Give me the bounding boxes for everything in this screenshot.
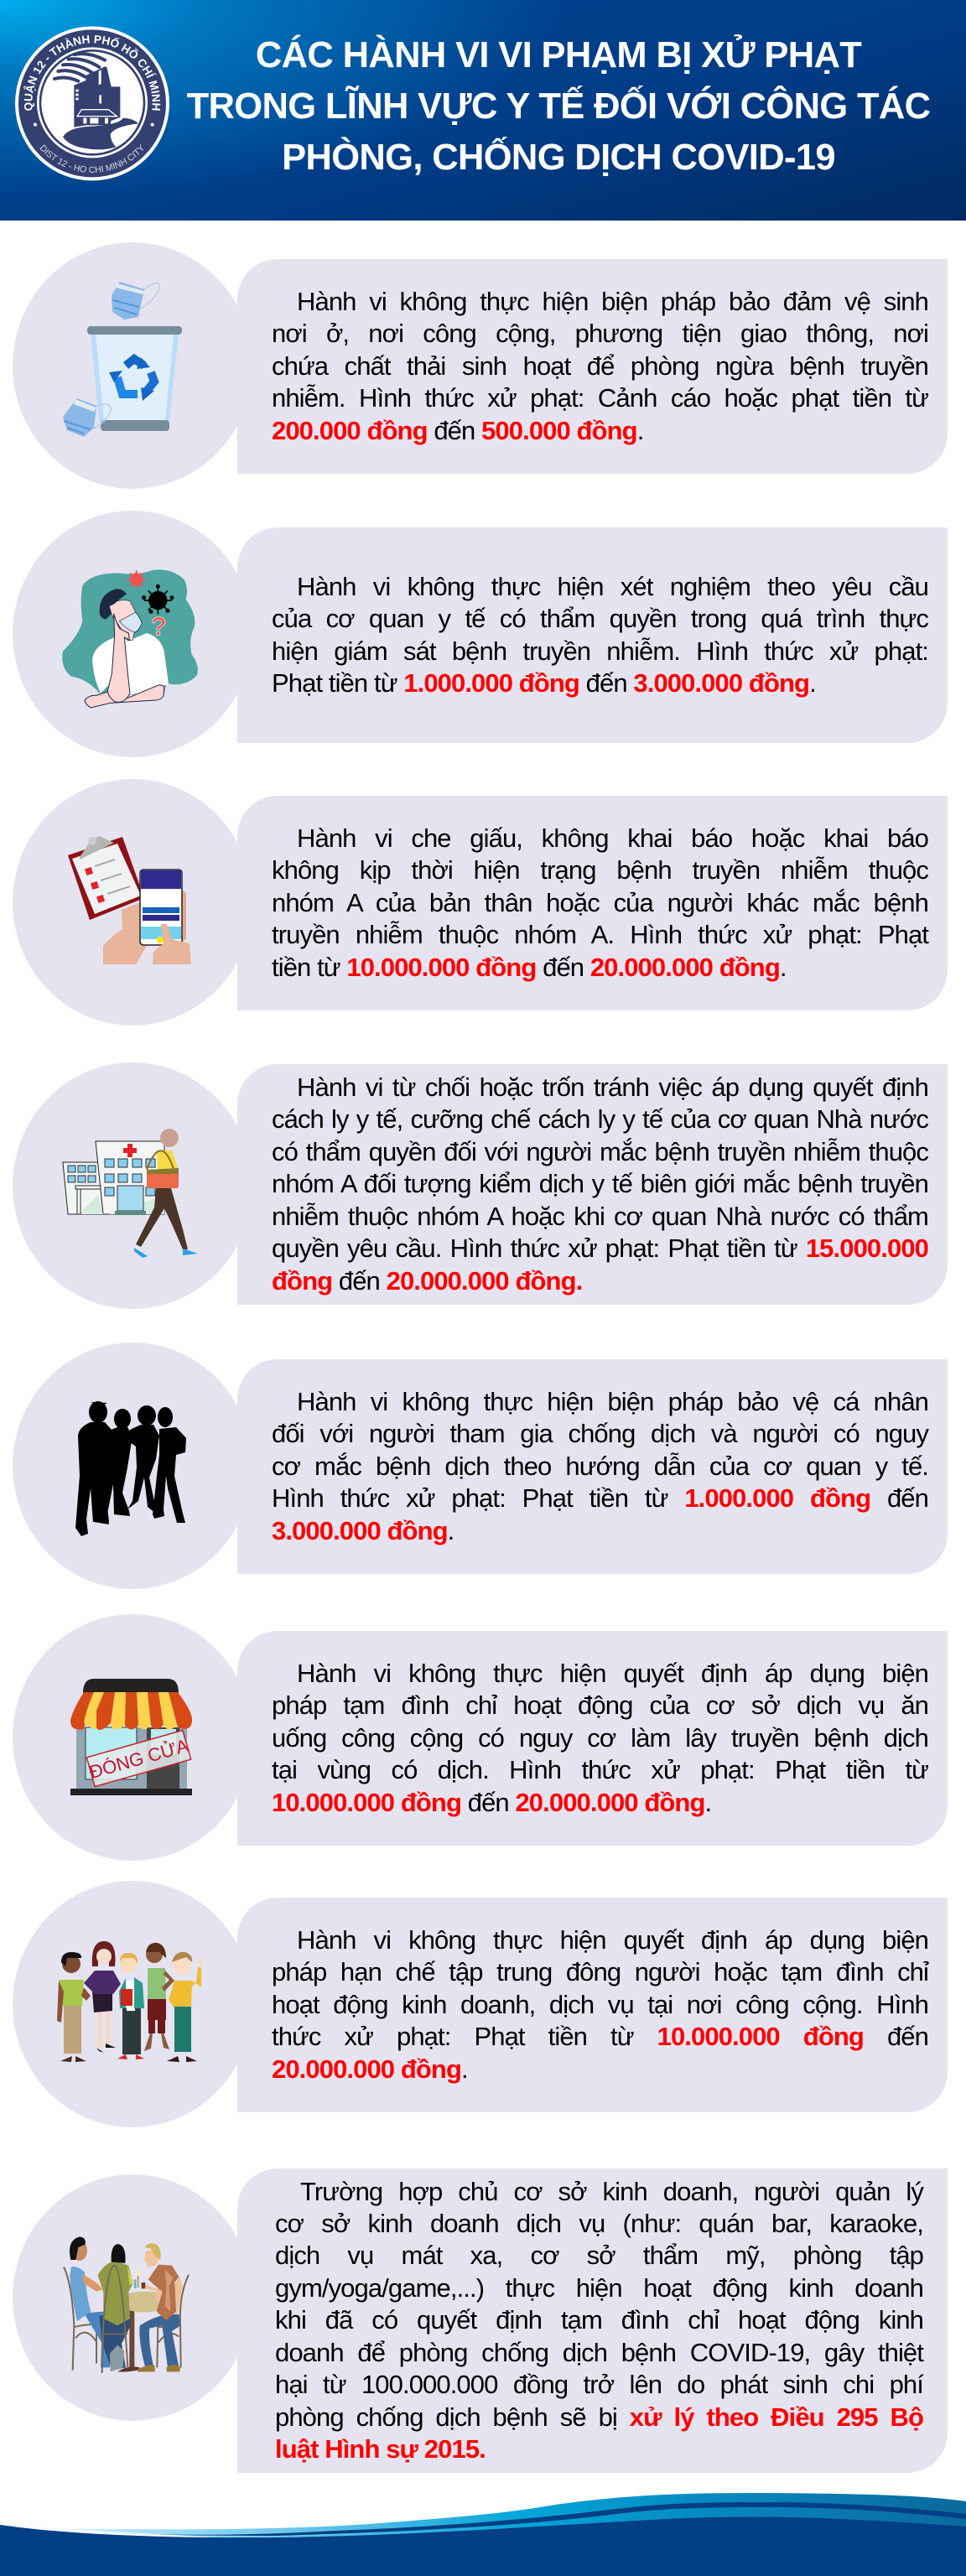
icon: hospital and walking person (62, 1129, 198, 1258)
text block 6: pháp tạm đình chỉ hoạt động của cơ sở dịch vụ ăn (272, 1690, 928, 1720)
text block 3: nhóm A của bản thân hoặc của người khác mắc bệnh (272, 888, 928, 917)
text block 6 (237, 1631, 948, 1846)
text block 4: nhóm A đối tượng kiểm dịch y tế biên giới mắc bệnh truyền (272, 1169, 928, 1198)
panel: violation 2 testing (13, 511, 948, 757)
text block 8: cơ sở kinh doanh dịch vụ (như: quán bar, karaoke, (275, 2209, 923, 2238)
panel: violation 5 personal protection (13, 1343, 948, 1589)
icon: worried man with mask (62, 569, 198, 708)
circle background (13, 242, 252, 489)
text block 1: Hành vi không thực hiện biện pháp bảo đảm vệ sinh (297, 287, 928, 316)
icon: district 12 logo: QUẬN 12 - THÀNH PHỐ HỒ CHÍ MINH (23, 35, 161, 111)
text block 4: đồng đến 20.000.000 đồng. (272, 1266, 582, 1296)
text block 3 (237, 796, 948, 1010)
text block 5: 3.000.000 đồng. (272, 1516, 454, 1545)
text block 5: đối với người tham gia chống dịch và người có nguy (272, 1419, 928, 1448)
text block 8: Trường hợp chủ cơ sở kinh doanh, người quản lý (300, 2177, 923, 2206)
text block 1: nơi ở, nơi công cộng, phương tiện giao thông, nơi (272, 319, 928, 348)
text block 8 (237, 2168, 948, 2473)
text block 4 (237, 1064, 948, 1305)
text block 5: cơ mắc bệnh dịch theo hướng dẫn của cơ quan y tế. (272, 1452, 928, 1481)
text block 6: Hành vi không thực hiện quyết định áp dụng biện (297, 1659, 928, 1688)
text block 7: hoạt động kinh doanh, dịch vụ tại nơi công cộng. Hình (272, 1990, 928, 2019)
circle background (13, 1062, 252, 1309)
panel: violation 1 sanitation (13, 242, 948, 489)
header banner (0, 0, 966, 221)
circle background (13, 1881, 252, 2127)
title (187, 34, 930, 178)
text block 5 (237, 1359, 948, 1574)
text block 2: của cơ quan y tế có thẩm quyền trong quá trình thực (272, 604, 928, 633)
footer wave (0, 2493, 966, 2576)
text block 8: dịch vụ mát xa, cơ sở thẩm mỹ, phòng tập (275, 2241, 923, 2270)
panel: violation 4 quarantine refusal (13, 1062, 948, 1309)
text block 3: Hành vi che giấu, không khai báo hoặc khai báo (297, 823, 928, 853)
text block 4: có thẩm quyền đối với người mắc bệnh truyền nhiễm thuộc (272, 1137, 928, 1166)
text block 5: Hành vi không thực hiện biện pháp bảo vệ cá nhân (297, 1387, 928, 1416)
circle background (13, 2174, 252, 2421)
icon: group of five people (57, 1941, 202, 2062)
icon: trash bin with masks (63, 282, 182, 437)
text block 8: gym/yoga/game,...) thực hiện hoạt động kinh doanh (275, 2273, 923, 2303)
text block 3: tiền từ 10.000.000 đồng đến 20.000.000 đồng. (272, 953, 787, 982)
text block 1: nhiễm. Hình thức xử phạt: Cảnh cáo hoặc phạt tiền từ (272, 383, 928, 413)
text block 7: pháp hạn chế tập trung đông người hoặc tạm đình chỉ (272, 1957, 928, 1987)
panel: violation 3 concealment (13, 779, 948, 1026)
text block 7 (237, 1898, 948, 2112)
text block 8: hại từ 100.000.000 đồng trở lên do phát sinh chi phí (275, 2370, 923, 2399)
circle background (13, 1343, 252, 1589)
icon: district 12 logo: DIST 12 - HO CHI MINH CITY (40, 144, 143, 173)
circle background (13, 779, 252, 1026)
text block 5: Hình thức xử phạt: Phạt tiền từ 1.000.000 đồng đến (272, 1483, 928, 1513)
text block 3: không kịp thời hiện trạng bệnh truyền nhiễm thuộc (272, 855, 928, 885)
text block 1: chứa chất thải sinh hoạt để phòng ngừa bệnh truyền (272, 351, 928, 381)
text block 7: 20.000.000 đồng. (272, 2054, 468, 2084)
text block 8: luật Hình sự 2015. (275, 2434, 486, 2464)
text block 1 (237, 259, 948, 474)
text block 4: quyền yêu cầu. Hình thức xử phạt: Phạt tiền từ 15.000.000 (272, 1233, 928, 1263)
text block 2 (237, 527, 948, 743)
text block 6: uống công cộng có nguy cơ làm lây truyền bệnh dịch (272, 1723, 928, 1753)
panel: violation 6 suspension (13, 1614, 948, 1861)
text block 2: Phạt tiền từ 1.000.000 đồng đến 3.000.000 đồng. (272, 668, 816, 698)
text block 1: 200.000 đồng đến 500.000 đồng. (272, 416, 643, 445)
text block 7: Hành vi không thực hiện quyết định áp dụng biện (297, 1925, 928, 1955)
text block 4: Hành vi từ chối hoặc trốn tránh việc áp dụng quyết định (297, 1072, 928, 1102)
text block 4: nhiễm thuộc nhóm A hoặc khi cơ quan Nhà nước có thẩm (272, 1202, 928, 1231)
text block 6: 10.000.000 đồng đến 20.000.000 đồng. (272, 1788, 711, 1817)
text block 8: doanh để phòng chống dịch bệnh COVID-19, gây thiệt (275, 2338, 923, 2367)
text block 6: tại vùng có dịch. Hình thức xử phạt: Phạt tiền từ (272, 1755, 928, 1784)
circle background (13, 511, 252, 757)
icon: clipboard and phone (68, 836, 191, 964)
text block 2: Hành vi không thực hiện xét nghiệm theo yêu cầu (297, 572, 928, 601)
text block 7: thức xử phạt: Phạt tiền từ 10.000.000 đồng đến (272, 2022, 928, 2051)
icon: closed shop: ĐÓNG CỬA (87, 1735, 191, 1783)
text block 2: hiện giám sát bệnh truyền nhiễm. Hình thức xử phạt: (272, 636, 928, 666)
title: TRONG LĨNH VỰC Y TẾ ĐỐI VỚI CÔNG TÁC (187, 86, 930, 127)
text block 4: cách ly y tế, cưỡng chế cách ly y tế của cơ quan Nhà nước (272, 1104, 928, 1134)
text block 3: truyền nhiễm thuộc nhóm A. Hình thức xử phạt: Phạt (272, 920, 928, 949)
icon: district 12 logo (15, 26, 169, 181)
icon: four silhouettes (75, 1401, 186, 1536)
title: CÁC HÀNH VI VI PHẠM BỊ XỬ PHẠT (256, 35, 861, 75)
text block 8: khi đã có quyết định tạm đình chỉ hoạt động kinh (275, 2305, 923, 2334)
circle background (13, 1614, 252, 1861)
title: PHÒNG, CHỐNG DỊCH COVID-19 (282, 138, 835, 178)
icon: worried man with mask: ? (151, 611, 167, 641)
icon: people at a table (63, 2236, 190, 2373)
icon: closed shop (70, 1679, 193, 1795)
text block 8: phòng chống dịch bệnh sẽ bị xử lý theo Điều 295 Bộ (275, 2402, 923, 2432)
